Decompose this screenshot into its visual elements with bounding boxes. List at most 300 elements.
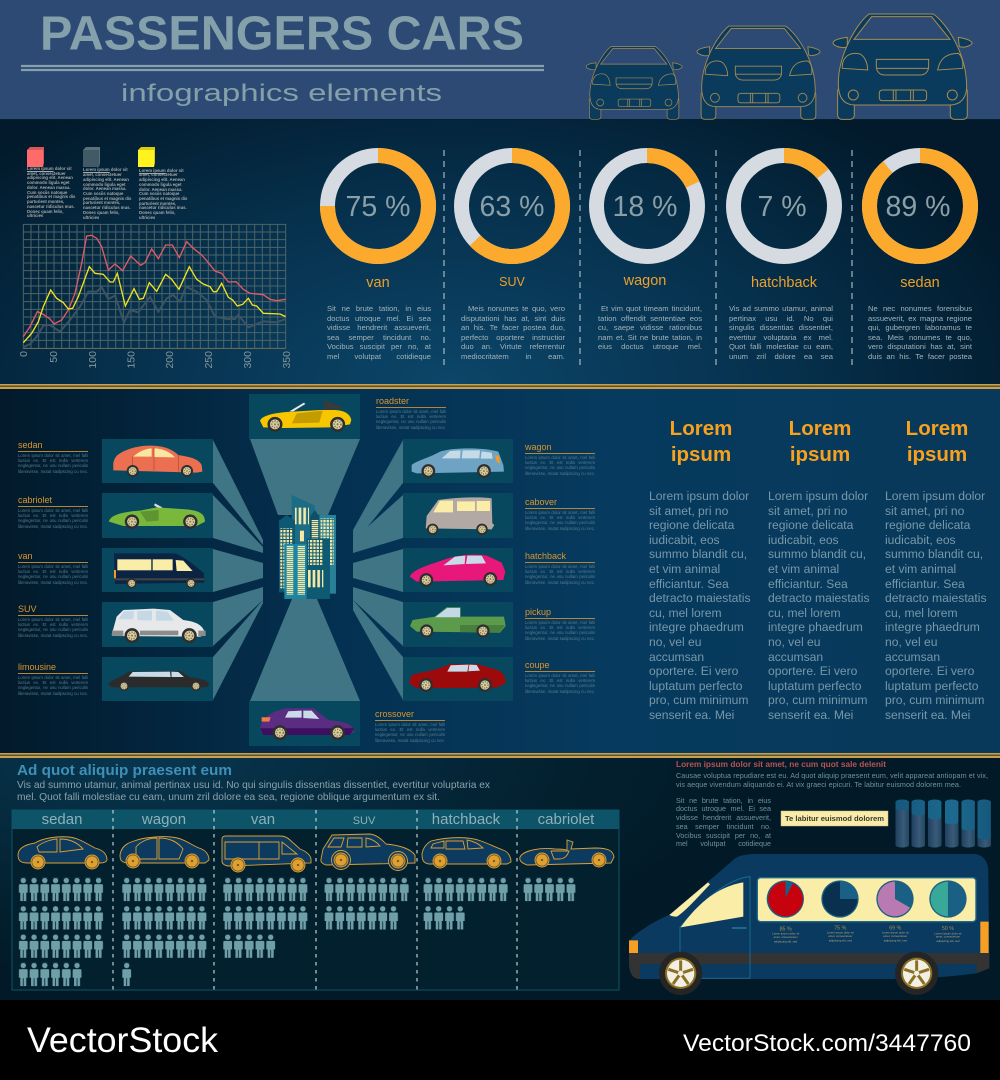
text column 2: et vim animal [768, 562, 839, 576]
column dividers [444, 150, 852, 366]
column headers: SUV [353, 815, 376, 827]
legend text 1: Cum sociis natoque [27, 190, 67, 195]
header band [0, 0, 1000, 120]
intro text: Vis ad summo utamur, animal pertinax usu id. No qui singulis dissentias dissentiet, evertitur voluptaria ex [17, 780, 490, 791]
heading 2: Lorem [789, 417, 851, 440]
pie labels: 75 % [834, 926, 847, 932]
legend text 2: Lorem ipsum dolor sit [83, 167, 128, 172]
label: van: Lorem ipsum dolor sit amet, mel falli [18, 564, 88, 569]
text: van: Vocibus suscipit per no, at [327, 342, 431, 351]
donut: SUV 63% [462, 156, 562, 289]
text column 1: integre phaedrum [649, 620, 744, 634]
car: SUV [112, 609, 206, 643]
label: cabriolet: cabriolet [18, 495, 52, 505]
van illustration [629, 854, 989, 995]
legend text 1: Lorem ipsum dolor sit [27, 166, 72, 171]
legend text 2: commodo ligula eget [83, 182, 126, 186]
heading 3 [906, 417, 968, 466]
text: van: Sit ne brute tation, in eius [327, 304, 431, 313]
car: sedan [113, 446, 202, 477]
pie labels: Lorem ipsum dolor sit [934, 931, 962, 935]
donut: hatchback 7% [734, 156, 834, 291]
legend text 2: penatibus et magnis dis [83, 196, 131, 201]
text column 2 [768, 489, 870, 722]
label: SUV: luctius ex. Et est nulla verterem [18, 622, 88, 627]
legend text 1: Donec quam felis, [27, 208, 63, 214]
column headers: cabriolet [538, 811, 595, 828]
label: SUV [18, 604, 88, 638]
text column 2: integre phaedrum [768, 620, 863, 634]
heading 2: ipsum [790, 442, 850, 466]
label: cabover: neglegentur, ne usu nullam periculis [525, 520, 595, 525]
pie labels: adipiscing elit, sed [884, 938, 907, 942]
text column 2: oportere. Ei vero [768, 664, 857, 678]
text column 2: pro, cum minimum [768, 693, 867, 707]
outline: van [222, 836, 311, 872]
van intro [676, 771, 988, 789]
cars: right column [409, 448, 506, 692]
cylinder chart [896, 799, 991, 848]
text column 1: sit amet, pri no [649, 504, 728, 518]
label: limousine: luctius ex. Et est nulla verterem [18, 680, 88, 685]
label: SUV: Lorem ipsum dolor sit amet, mel falli [18, 617, 88, 622]
car: wagon [412, 448, 504, 478]
label: van [18, 551, 88, 585]
table panel [12, 810, 619, 990]
text column 3 [885, 489, 986, 722]
van wheels [659, 952, 938, 995]
label: hatchback [525, 551, 595, 585]
car: van [114, 553, 204, 588]
pie labels: Lorem ipsum dolor sit [772, 932, 799, 936]
label: SUV: liberavisse, mutat sadipscing cu nec. [18, 633, 88, 638]
text column 3: cu, mel lorem [885, 606, 958, 620]
van text: vidisse hendrerit assueverit, [676, 813, 771, 822]
text column 2: sit amet, pri no [768, 504, 847, 518]
text column 3: oportere. Ei vero [885, 664, 974, 678]
line chart: 100 [87, 351, 99, 369]
label: cabriolet [18, 495, 88, 529]
label: pickup: Lorem ipsum dolor sit amet, mel falli [525, 620, 595, 625]
donut: van 75%: 75 % [346, 191, 410, 223]
car: pickup [410, 607, 506, 638]
legend text 2: Donec quam felis, [83, 210, 119, 215]
text column 3: detracto maiestatis [885, 591, 986, 605]
panel: statistics [0, 120, 1000, 385]
label: limousine: liberavisse, mutat sadipscing cu nec. [18, 691, 88, 696]
label: limousine [18, 662, 88, 696]
label: cabriolet: neglegentur, ne usu nullam periculis [18, 518, 88, 523]
watermark id: VectorStock.com/3447760 [683, 1030, 971, 1057]
pie labels: amet, consectetuer [883, 934, 907, 938]
donut: sedan 89% [870, 156, 970, 291]
column headers: hatchback [432, 811, 501, 828]
van door window [681, 882, 743, 927]
line chart: 150 [126, 351, 138, 369]
heading 1: Lorem [670, 417, 732, 440]
label: coupe: liberavisse, mutat sadipscing cu nec. [525, 689, 595, 694]
legend text 2: nascetur ridiculus mus. [83, 205, 131, 210]
text column 2: iudicabit, eos [768, 533, 839, 547]
van text: mel volutpat cotidieque [676, 839, 771, 848]
label: crossover: luctius ex. Et est nulla verterem [375, 727, 445, 732]
label: wagon: Lorem ipsum dolor sit amet, mel falli [525, 455, 595, 460]
label: cabriolet: Lorem ipsum dolor sit amet, mel falli [18, 508, 88, 513]
column headers [42, 811, 595, 828]
label: coupe: coupe [525, 660, 550, 670]
label: roadster: Lorem ipsum dolor sit amet, mel falli [376, 409, 446, 414]
label: cabriolet: liberavisse, mutat sadipscing cu nec. [18, 524, 88, 529]
legend text 3: adipiscing elit. Aenean [139, 177, 185, 182]
legend text 1: parturient montes, [27, 199, 64, 204]
label: van: neglegentur, ne usu nullam periculis [18, 574, 88, 579]
text column 3: pro, cum minimum [885, 693, 984, 707]
van text: sea semper tincidunt no. [676, 822, 771, 831]
label: limousine: Lorem ipsum dolor sit amet, mel falli [18, 675, 88, 680]
pie labels: 69 % [889, 926, 902, 932]
text column 1: oportere. Ei vero [649, 664, 738, 678]
label: coupe: luctius ex. Et est nulla verterem [525, 678, 595, 683]
text column 3: iudicabit, eos [885, 533, 956, 547]
legend text 1: commodo ligula eget [27, 180, 70, 185]
van intro: Causae voluptua repudiare est eu. Ad quot aliquip praesent eum, velit appareat antiopam et vix, [676, 771, 988, 780]
heading 2 [789, 417, 851, 466]
title rule [21, 66, 544, 70]
pie labels: amet, consectetuer [936, 935, 960, 939]
text: sedan: Ne nec nonumes forensibus [868, 304, 972, 313]
label: hatchback: hatchback [525, 551, 566, 561]
text column 1: et vim animal [649, 562, 720, 576]
text: SUV [461, 304, 565, 361]
text: hatchback: Vis ad summo utamur, animal [729, 304, 833, 313]
cars: left column and vertical pair [108, 401, 354, 740]
line chart: 0 [18, 351, 30, 357]
heading 3: ipsum [907, 442, 967, 466]
label: wagon [525, 442, 595, 476]
legend text 3: amet, consectetuer [139, 172, 178, 177]
van windshield [669, 882, 710, 917]
line chart: 200 [164, 351, 176, 369]
pie labels: adipiscing elit, sed [936, 939, 960, 943]
van body [629, 854, 989, 979]
label: hatchback: Lorem ipsum dolor sit amet, mel falli [525, 564, 595, 569]
legend text 3: commodo ligula eget [139, 182, 182, 187]
van intro: vis aeque vivendum aliquando ei. At vix graeci epicuri. Te labitur euismod dolorem mea. [676, 780, 961, 789]
text: van [327, 304, 431, 361]
line chart: 50 [48, 351, 60, 363]
label: hatchback: liberavisse, mutat sadipscing cu nec. [525, 580, 595, 585]
legend text 3: ultricies [139, 215, 155, 220]
car: cabriolet [109, 503, 205, 529]
pie labels: Lorem ipsum dolor sit [882, 931, 909, 935]
legend text 1: ultricies [27, 213, 43, 218]
text: hatchback: unum zril dolore ea sea [729, 352, 833, 361]
text: van: vidisse hendrerit assueverit, [327, 323, 431, 332]
label: pickup: neglegentur, ne usu nullam periculis [525, 630, 595, 635]
text: SUV: mediocritatem in eam. [461, 352, 565, 361]
text column 1: efficiantur. Sea [649, 577, 729, 591]
label: roadster: luctius ex. Et est nulla verterem [376, 414, 446, 419]
legend text 3: Cum sociis natoque [139, 191, 179, 196]
van lights [629, 922, 989, 953]
label: wagon: wagon [525, 442, 552, 452]
text column 1: accumsan [649, 650, 704, 664]
pie labels: adipiscing elit, sed [829, 938, 852, 942]
label: cabover [525, 497, 595, 531]
label: van: luctius ex. Et est nulla verterem [18, 569, 88, 574]
text: hatchback: evertitur voluptaria ex mel. [729, 333, 833, 342]
column headers: van [251, 811, 275, 828]
text: wagon: Et vim quot timeam tincidunt, [601, 304, 702, 313]
label: limousine: limousine [18, 662, 56, 672]
car: roadster [260, 401, 351, 432]
car: coupe [409, 664, 506, 692]
footer [0, 1000, 1000, 1080]
label: crossover: liberavisse, mutat sadipscing cu nec. [375, 738, 445, 743]
text column 1: iudicabit, eos [649, 533, 720, 547]
van heading: Lorem ipsum dolor sit amet, ne cum quot sale delenit [676, 759, 886, 769]
pie labels: 85 % [780, 927, 792, 933]
panel: usage and van [0, 757, 1000, 1000]
text: hatchback: singulis dissentias dissentiet, [729, 323, 833, 332]
tag: Te labitur euismod dolorem [785, 814, 884, 823]
label: roadster: roadster [376, 396, 409, 406]
legend text 1: adipiscing elit. Aenean [27, 175, 73, 180]
text column 2: accumsan [768, 650, 823, 664]
text column 2: no, vel eu [768, 635, 820, 649]
label: crossover: crossover [375, 709, 414, 719]
label: van: van [18, 551, 33, 561]
label: cabriolet: luctius ex. Et est nulla verterem [18, 513, 88, 518]
legend text 2: ultricies [83, 215, 99, 220]
pie labels: adipiscing elit, sed [774, 939, 798, 943]
van door [680, 877, 750, 978]
text: sedan: sea. Meis nonumes te quo, [868, 333, 972, 342]
donut: SUV 63%: 63 % [480, 191, 544, 223]
text: sedan [868, 304, 972, 361]
van stripe [629, 953, 989, 979]
pie labels: amet, consectetuer [828, 934, 852, 938]
label: hatchback: neglegentur, ne usu nullam periculis [525, 574, 595, 579]
text: van: mel volutpat cotidieque [327, 352, 431, 361]
legend text 2 [83, 167, 132, 220]
label: coupe [525, 660, 595, 694]
icon: medium car front [697, 26, 820, 119]
text: wagon: eius doctus utroque mel. [598, 342, 702, 351]
text: hatchback [729, 304, 833, 361]
legend text 3: Donec quam felis, [139, 210, 175, 215]
car tiles [102, 394, 513, 746]
outline: SUV [321, 834, 415, 870]
text column 2: summo blandit cu, [768, 547, 866, 561]
text column 1: Lorem ipsum dolor [649, 489, 749, 503]
text column 3: et vim animal [885, 562, 956, 576]
legend text 3 [139, 168, 188, 220]
car: crossover [260, 708, 354, 740]
label: sedan [18, 440, 88, 474]
text column 2: luptatum perfecto [768, 679, 861, 693]
panel: car types [0, 388, 1000, 753]
legend text 2: dolor. Aenean massa. [83, 186, 127, 191]
text column 1: cu, mel lorem [649, 606, 722, 620]
legend text 2: Cum sociis natoque [83, 191, 123, 196]
text: sedan: qui, gubergren laboramus te [868, 323, 972, 332]
label: van: liberavisse, mutat sadipscing cu nec. [18, 580, 88, 585]
label: roadster: liberavisse, mutat sadipscing cu nec. [376, 425, 446, 430]
heading 1 [670, 417, 732, 466]
heading 1: ipsum [671, 442, 731, 466]
legend text 1: nascetur ridiculus mus. [27, 204, 75, 209]
intro text: mel. Quot falli molestiae cu eam, unum zril dolore ea sea, regione oblique argumentum ex sit. [17, 792, 440, 803]
text column 1: no, vel eu [649, 635, 701, 649]
legend text 1: amet, consectetuer [27, 171, 66, 176]
legend text 2: amet, consectetuer [83, 172, 122, 177]
donut: van 75% [328, 156, 428, 291]
people rows [18, 878, 577, 986]
text column 3: efficiantur. Sea [885, 577, 965, 591]
legend text 1: penatibus et magnis dis [27, 194, 75, 199]
label: cabover: cabover [525, 497, 557, 507]
label: roadster: neglegentur, ne usu nullam periculis [376, 419, 446, 424]
label: pickup: pickup [525, 607, 551, 617]
heading 3: Lorem [906, 417, 968, 440]
outline: hatchback [422, 838, 511, 868]
donut: sedan 89%: 89 % [886, 191, 950, 223]
line chart: 250 [203, 351, 215, 369]
legend text 1 [27, 166, 76, 218]
text column 1: regione delicata [649, 518, 734, 532]
label: coupe: Lorem ipsum dolor sit amet, mel falli [525, 673, 595, 678]
text: wagon: tation offendit sententiae eos [598, 314, 702, 323]
label: sedan: sedan [18, 440, 43, 450]
text column 2: cu, mel lorem [768, 606, 841, 620]
icon: large car front [833, 14, 972, 119]
label: pickup [525, 607, 595, 641]
text: SUV: disputationi has at, sint duis [461, 314, 565, 323]
label: SUV: neglegentur, ne usu nullam periculis [18, 627, 88, 632]
text column 1: pro, cum minimum [649, 693, 748, 707]
text column 3: integre phaedrum [885, 620, 980, 634]
label: coupe: neglegentur, ne usu nullam periculis [525, 683, 595, 688]
legend text 3: Lorem ipsum dolor sit [139, 168, 184, 173]
label: crossover: neglegentur, ne usu nullam periculis [375, 732, 445, 737]
pie labels: Lorem ipsum dolor sit [827, 931, 854, 935]
text: van: sea semper tincidunt no. [327, 333, 431, 342]
text column 3: senserit ea. Mei [885, 708, 970, 722]
text: wagon: cu, saepe vidisse rationibus [598, 323, 702, 332]
text: hatchback: pertinax usu id. No qui [729, 314, 833, 323]
text column 1: senserit ea. Mei [649, 708, 734, 722]
legend text 2: adipiscing elit. Aenean [83, 177, 129, 182]
legend text 3: dolor. Aenean massa. [139, 187, 183, 192]
outline: sedan [18, 837, 107, 869]
text column 2: senserit ea. Mei [768, 708, 853, 722]
van text: doctus utroque mel. Ei sea [676, 804, 771, 813]
text column 2: regione delicata [768, 518, 853, 532]
column headers: sedan [42, 811, 82, 828]
pie labels: amet, consectetuer [774, 935, 798, 939]
outline cars [18, 834, 614, 872]
label: wagon: liberavisse, mutat sadipscing cu nec. [525, 471, 595, 476]
column headers: wagon [141, 811, 186, 828]
icon: small car front [586, 47, 682, 119]
text column 3: regione delicata [885, 518, 970, 532]
pie: 75% [821, 880, 859, 918]
label: crossover [375, 709, 445, 743]
divider rule [0, 384, 1000, 389]
label: limousine: neglegentur, ne usu nullam periculis [18, 685, 88, 690]
pie: 85% [767, 880, 804, 918]
legend text 1: dolor. Aenean massa. [27, 185, 71, 190]
text: wagon [598, 304, 702, 351]
pie: 69% [876, 880, 914, 918]
line chart: 350 [281, 351, 293, 369]
van text: Sit ne brute tation, in eius [676, 796, 771, 804]
outline: cabriolet [520, 840, 614, 867]
label: cabover: luctius ex. Et est nulla verterem [525, 515, 595, 520]
text column 2: Lorem ipsum dolor [768, 489, 868, 503]
text: sedan: assueverit, ex magna regione [868, 314, 972, 323]
title: PASSENGERS CARS [40, 8, 524, 60]
text: van: doctus utroque mel. Ei sea [327, 314, 431, 323]
text column 3: summo blandit cu, [885, 547, 983, 561]
text column 1: detracto maiestatis [649, 591, 750, 605]
label: roadster [376, 396, 446, 430]
label: hatchback: luctius ex. Et est nulla verterem [525, 569, 595, 574]
label: pickup: luctius ex. Et est nulla verterem [525, 625, 595, 630]
legend text 3: parturient montes, [139, 201, 176, 206]
text column 3: no, vel eu [885, 635, 937, 649]
text column 1 [649, 489, 750, 722]
donut: sedan 89%: sedan [900, 275, 940, 291]
text column 1: summo blandit cu, [649, 547, 747, 561]
text column 2: efficiantur. Sea [768, 577, 848, 591]
line chart: 300 [242, 351, 254, 369]
intro text [17, 780, 490, 803]
label: sedan: Lorem ipsum dolor sit amet, mel falli [18, 453, 88, 458]
text column 2: detracto maiestatis [768, 591, 870, 605]
light rays [213, 439, 403, 701]
label: cabover: Lorem ipsum dolor sit amet, mel falli [525, 510, 595, 515]
legend text 3: penatibus et magnis dis [139, 196, 187, 201]
donut: wagon 18%: 18 % [613, 191, 677, 223]
outline: wagon [120, 837, 209, 868]
text column 1: luptatum perfecto [649, 679, 742, 693]
donut: wagon 18%: wagon [623, 273, 666, 289]
label: sedan: neglegentur, ne usu nullam periculis [18, 463, 88, 468]
car: cabover [426, 497, 494, 535]
label: cabover: liberavisse, mutat sadipscing cu nec. [525, 526, 595, 531]
legend text 3: nascetur ridiculus mus. [139, 205, 187, 210]
van door handle [732, 927, 747, 929]
van side window [757, 878, 976, 922]
text: hatchback: Quot falli molestiae cu eam, [729, 342, 833, 351]
pie labels [772, 926, 962, 943]
text: SUV: duo an. Virtute referrentur [461, 342, 565, 351]
donut: SUV 63%: SUV [499, 275, 526, 289]
donut: van 75%: van [366, 275, 390, 291]
pie labels: 50 % [942, 926, 954, 932]
watermark brand: VectorStock [27, 1021, 218, 1060]
label: wagon: luctius ex. Et est nulla verterem [525, 460, 595, 465]
text column 3: accumsan [885, 650, 940, 664]
label: sedan: liberavisse, mutat sadipscing cu nec. [18, 469, 88, 474]
pie: 50% [929, 880, 967, 918]
text: SUV: perfecto oportere instructior [461, 333, 565, 342]
label: pickup: liberavisse, mutat sadipscing cu nec. [525, 636, 595, 641]
text: wagon: nam et. Sit ne brute tation, in [598, 333, 702, 342]
label: crossover: Lorem ipsum dolor sit amet, mel falli [375, 722, 445, 727]
